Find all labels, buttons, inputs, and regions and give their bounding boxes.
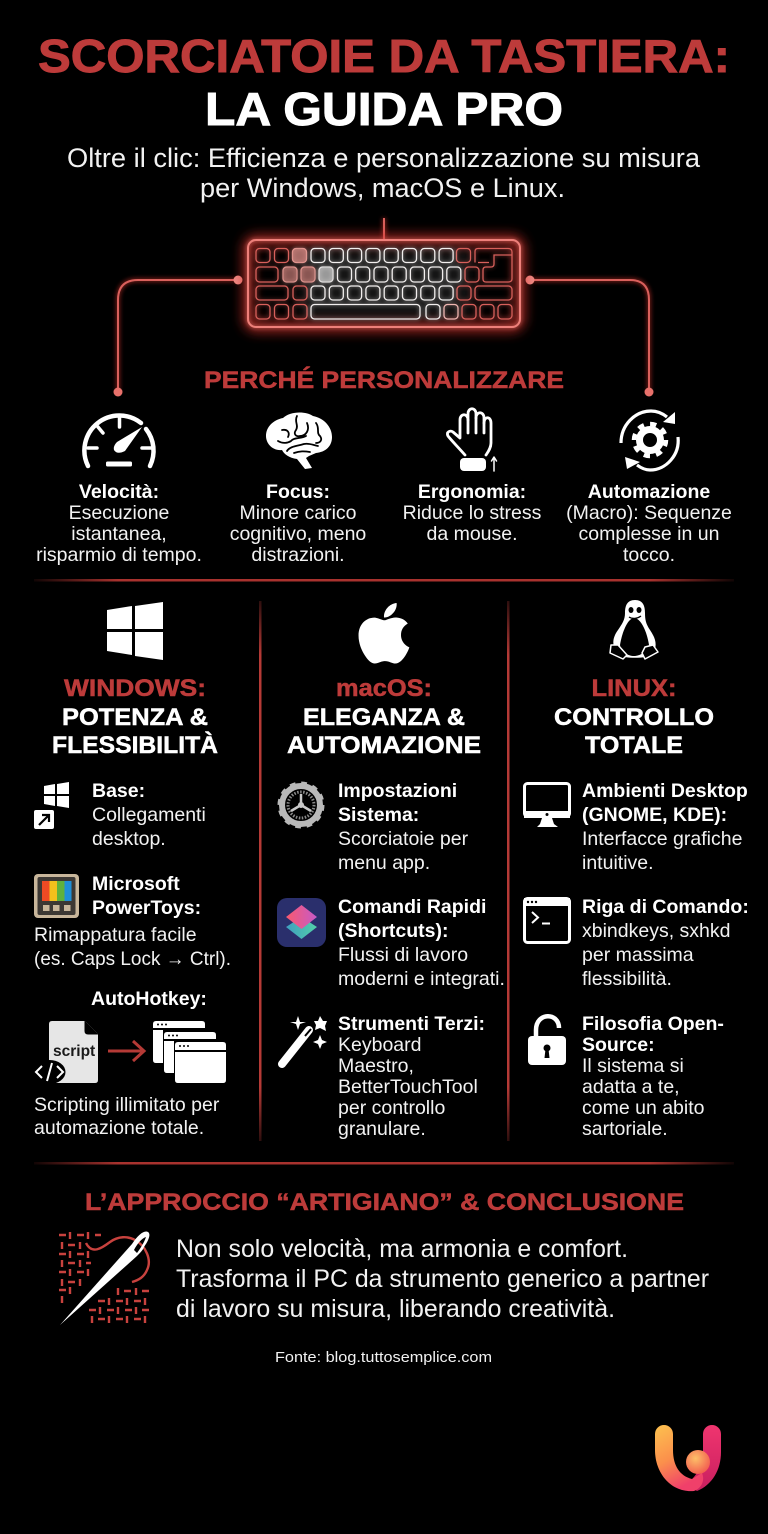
heading: macos: macOS: — [336, 675, 432, 702]
icon: terminal — [524, 898, 570, 942]
text: autohotkey description — [34, 1094, 220, 1139]
icon: desktop monitor — [524, 784, 570, 827]
heading: macos: AUTOMAZIONE — [287, 732, 481, 759]
connector lines — [114, 218, 654, 396]
icon: speedometer — [84, 416, 154, 466]
title: LA GUIDA PRO — [205, 83, 563, 135]
text: shortcuts: Flussi di lavoro — [338, 944, 468, 966]
text: open source philosophy: sartoriale. — [582, 1118, 668, 1140]
benefit: automation: complesse in un — [579, 523, 719, 545]
benefit: ergonomics: Ergonomia: — [418, 481, 526, 503]
text: desktop environments: Ambienti Desktop — [582, 780, 748, 802]
text: system settings: Scorciatoie per — [338, 828, 469, 850]
text: third party tools: Maestro, — [338, 1055, 414, 1077]
text: third party tools: Strumenti Terzi: — [338, 1013, 485, 1035]
conclusion text — [176, 1235, 709, 1323]
text: command line: xbindkeys, sxhkd — [582, 920, 730, 942]
heading: conclusion: L’APPROCCIO “ARTIGIANO” & CONCLUSIONE — [85, 1189, 684, 1216]
heading: macos: ELEGANZA & — [303, 704, 465, 731]
icon: open padlock — [528, 1016, 566, 1065]
arrow: script to windows — [108, 1041, 144, 1061]
title — [38, 30, 730, 135]
text: base: desktop. — [92, 828, 166, 850]
text: open source philosophy: come un abito — [582, 1097, 705, 1119]
text: desktop environments: Interfacce grafiche — [582, 828, 742, 850]
benefit: speed: risparmio di tempo. — [36, 544, 202, 566]
text: third party tools: per controllo — [338, 1097, 445, 1119]
text: open source philosophy: Source: — [582, 1034, 655, 1056]
logo — [655, 1425, 721, 1491]
subtitle: per Windows, macOS e Linux. — [200, 173, 565, 203]
benefit: ergonomics: da mouse. — [426, 523, 518, 545]
benefit: ergonomics — [403, 481, 542, 545]
icon: desktop shortcut — [34, 782, 69, 829]
icon: magic wand — [282, 1016, 327, 1064]
heading: linux: CONTROLLO — [554, 704, 714, 731]
icon: script file — [34, 1021, 98, 1084]
icon: hand and wrist — [447, 409, 496, 471]
text: shortcuts: moderni e integrati. — [338, 968, 505, 990]
conclusion text: Non solo velocità, ma armonia e comfort. — [176, 1235, 628, 1263]
icon: needle and stitches — [59, 1232, 149, 1325]
benefit: speed: Velocità: — [79, 481, 159, 503]
text: desktop environments — [582, 780, 748, 874]
text: command line — [582, 896, 749, 990]
text: shortcuts — [338, 896, 505, 990]
benefit: speed — [36, 481, 202, 566]
benefit: automation: (Macro): Sequenze — [566, 502, 732, 524]
icon: apple logo — [359, 603, 409, 663]
icon: powertoys — [34, 874, 79, 918]
icon: automation gear — [621, 411, 678, 470]
icon: script file: script — [53, 1043, 95, 1060]
text: system settings — [338, 780, 469, 874]
benefit: speed: Esecuzione — [69, 502, 169, 524]
text: third party tools: Keyboard — [338, 1034, 421, 1056]
subtitle — [67, 143, 701, 203]
heading: linux — [554, 675, 714, 759]
text: open source philosophy: adatta a te, — [582, 1076, 680, 1098]
subtitle: Oltre il clic: Efficienza e personalizzazione su misura — [67, 143, 701, 173]
text: powertoys: Microsoft — [92, 873, 180, 895]
text: command line: flessibilità. — [582, 968, 672, 990]
benefit: speed: istantanea, — [71, 523, 167, 545]
heading: windows — [52, 675, 218, 759]
text: open source philosophy — [582, 1013, 724, 1140]
benefit: automation: tocco. — [623, 544, 675, 566]
icon: windows logo — [107, 602, 163, 660]
benefit: focus: Minore carico — [239, 502, 357, 524]
text: autohotkey description: Scripting illimitato per — [34, 1094, 220, 1116]
text: command line: Riga di Comando: — [582, 896, 749, 918]
source credit: Fonte: blog.tuttosemplice.com — [275, 1349, 492, 1366]
benefit: focus: distrazioni. — [251, 544, 345, 566]
text: shortcuts: (Shortcuts): — [338, 920, 448, 942]
benefit: automation: Automazione — [588, 481, 710, 503]
text: powertoys: (es. Caps Lock → Ctrl). — [34, 948, 231, 970]
icon: system settings gear — [280, 784, 322, 826]
text: open source philosophy: Filosofia Open- — [582, 1013, 724, 1035]
text: third party tools — [338, 1013, 485, 1140]
text: command line: per massima — [582, 944, 694, 966]
text: desktop environments: intuitive. — [582, 852, 654, 874]
heading: windows: POTENZA & — [62, 704, 208, 731]
text: powertoys — [34, 873, 231, 970]
heading: windows: WINDOWS: — [64, 675, 206, 702]
heading: macos — [287, 675, 481, 759]
text: system settings: menu app. — [338, 852, 430, 874]
benefit: focus: cognitivo, meno — [230, 523, 366, 545]
benefit: focus: Focus: — [266, 481, 330, 503]
title: SCORCIATOIE DA TASTIERA: — [38, 30, 730, 82]
text: third party tools: granulare. — [338, 1118, 426, 1140]
text: system settings: Impostazioni — [338, 780, 457, 802]
heading: why customize: PERCHÉ PERSONALIZZARE — [204, 366, 564, 394]
heading: linux: LINUX: — [592, 675, 676, 702]
benefit: ergonomics: Riduce lo stress — [403, 502, 542, 524]
text: base: Collegamenti — [92, 804, 206, 826]
icon: shortcuts app — [277, 898, 326, 947]
heading: windows: FLESSIBILITÀ — [52, 731, 218, 759]
heading: linux: TOTALE — [585, 732, 683, 759]
keyboard illustration — [248, 240, 520, 327]
icon: window stack — [153, 1021, 226, 1083]
text: autohotkey label: AutoHotkey: — [91, 988, 207, 1010]
conclusion text: Trasforma il PC da strumento generico a partner — [176, 1265, 709, 1293]
text: desktop environments: (GNOME, KDE): — [582, 804, 727, 826]
conclusion text: di lavoro su misura, liberando creatività. — [176, 1295, 615, 1323]
text: powertoys: PowerToys: — [92, 897, 201, 919]
icon: brain — [266, 412, 332, 469]
text: shortcuts: Comandi Rapidi — [338, 896, 486, 918]
text: third party tools: BetterTouchTool — [338, 1076, 478, 1098]
icon: linux penguin — [610, 600, 658, 659]
benefit: focus — [230, 481, 366, 566]
benefit: automation — [566, 481, 732, 566]
text: system settings: Sistema: — [338, 804, 419, 826]
text: powertoys: Rimappatura facile — [34, 924, 197, 946]
text: base: Base: — [92, 780, 145, 802]
text: base — [92, 780, 206, 850]
text: autohotkey description: automazione totale. — [34, 1117, 204, 1139]
text: open source philosophy: Il sistema si — [582, 1055, 684, 1077]
